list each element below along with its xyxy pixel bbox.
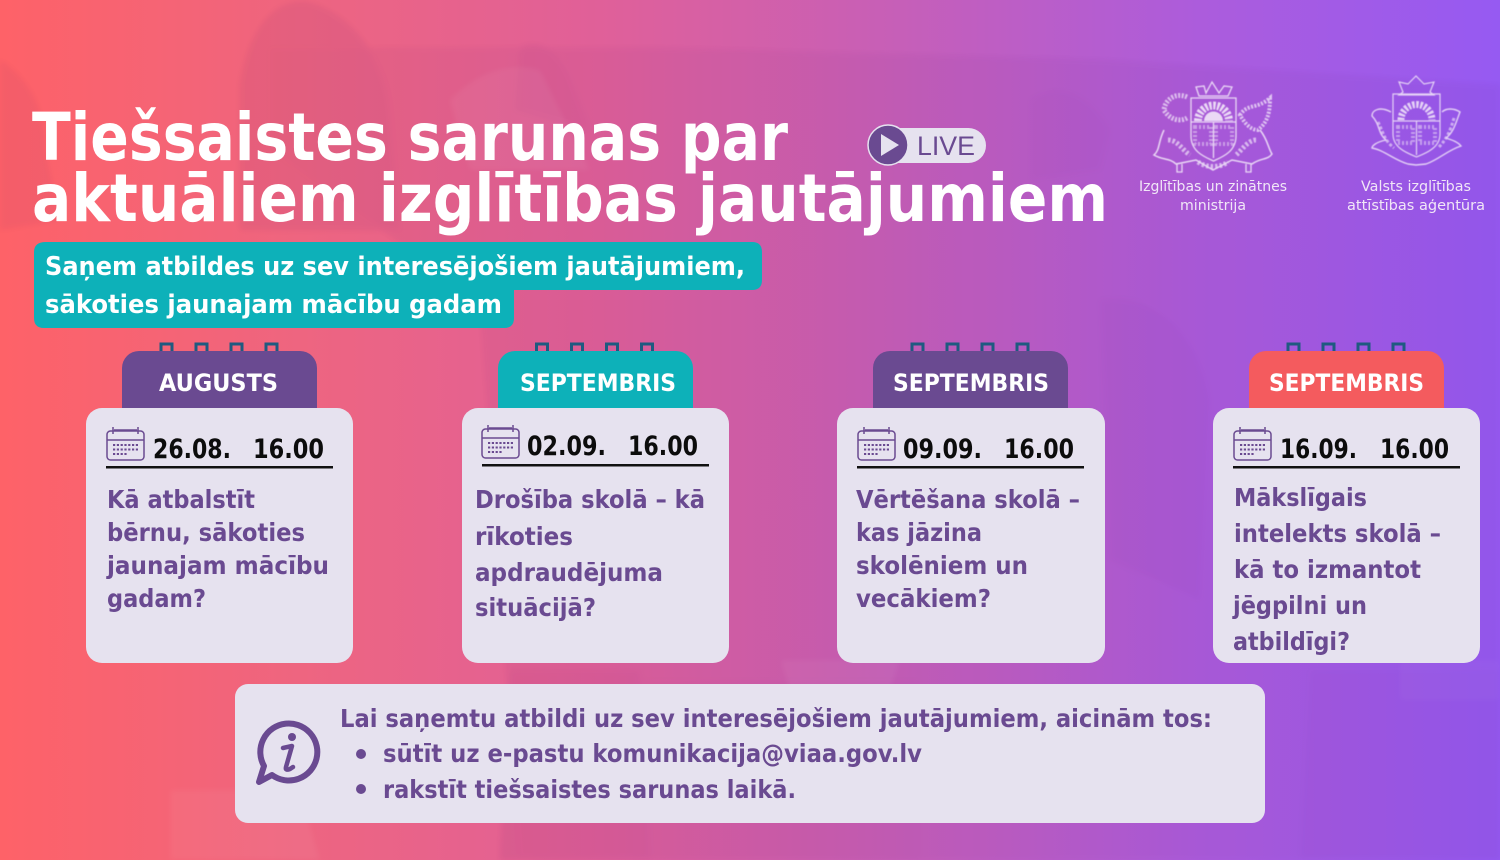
question text bbox=[856, 485, 1080, 613]
panel: event 2 September bbox=[462, 344, 729, 663]
date and time bbox=[857, 434, 1084, 468]
month tab: Septembris bbox=[1249, 351, 1444, 426]
title: aktuāliem izglītības jautājumiem bbox=[32, 160, 1108, 237]
question text: kas jāzina bbox=[856, 518, 982, 547]
question text: atbildīgi? bbox=[1233, 627, 1350, 656]
agency name bbox=[1347, 179, 1485, 214]
date and time: 16.00 bbox=[628, 431, 698, 462]
icon: live badge: LIVE bbox=[917, 131, 975, 161]
date and time: 16.00 bbox=[1380, 434, 1449, 465]
text: instructions: sūtīt uz e-pastu komunikacija@viaa.gov.lv bbox=[383, 739, 922, 768]
month tab: Septembris bbox=[873, 351, 1068, 426]
date and time: 09.09. bbox=[903, 434, 982, 465]
question text: rīkoties bbox=[475, 522, 573, 551]
date and time bbox=[1233, 434, 1460, 468]
month tab: Septembris bbox=[498, 351, 693, 426]
panel: event 9 September bbox=[837, 344, 1105, 663]
icon: live badge bbox=[868, 125, 986, 165]
question text bbox=[475, 485, 705, 622]
question text: intelekts skolā – bbox=[1234, 519, 1441, 548]
agency name: attīstības aģentūra bbox=[1347, 198, 1485, 214]
icon: calendar bbox=[107, 427, 144, 460]
question text: situācijā? bbox=[475, 593, 596, 622]
month tab: Augusts bbox=[122, 351, 317, 426]
title bbox=[32, 99, 1108, 237]
icon: calendar bbox=[482, 425, 519, 458]
subtitle highlight: sākoties jaunajam mācību gadam bbox=[45, 290, 502, 320]
logo: ministry coat of arms bbox=[1139, 82, 1287, 214]
question text: Vērtēšana skolā – bbox=[856, 485, 1080, 514]
month tab: Septembris: SEPTEMBRIS bbox=[520, 369, 676, 397]
date and time bbox=[482, 431, 709, 466]
question text: bērnu, sākoties bbox=[107, 518, 305, 547]
question text bbox=[106, 485, 329, 613]
question text: kā to izmantot bbox=[1234, 555, 1421, 584]
text: instructions: rakstīt tiešsaistes sarunas laikā. bbox=[383, 775, 796, 804]
month tab: Septembris: SEPTEMBRIS bbox=[893, 369, 1049, 397]
panel: event 16 September bbox=[1213, 344, 1480, 663]
subtitle highlight bbox=[34, 242, 762, 328]
ministry name: ministrija bbox=[1180, 198, 1246, 214]
question text: Kā atbalstīt bbox=[107, 485, 255, 514]
month tab: Septembris: SEPTEMBRIS bbox=[1269, 369, 1424, 397]
question text bbox=[1232, 483, 1441, 656]
date and time: 02.09. bbox=[527, 431, 606, 462]
question text: vecākiem? bbox=[856, 584, 991, 613]
icon: calendar bbox=[1234, 427, 1271, 460]
date and time: 16.00 bbox=[253, 434, 324, 465]
text: instructions: Lai saņemtu atbildi uz sev interesējošiem jautājumiem, aicinām tos: bbox=[340, 704, 1212, 733]
date and time: 16.09. bbox=[1280, 434, 1357, 465]
logo: agency coat of arms bbox=[1347, 76, 1485, 214]
date and time: 16.00 bbox=[1004, 434, 1074, 465]
ministry name bbox=[1139, 179, 1287, 214]
text: instructions bbox=[340, 704, 1212, 804]
date and time bbox=[106, 434, 333, 468]
date and time: 26.08. bbox=[153, 434, 231, 465]
question text: Mākslīgais bbox=[1234, 483, 1367, 512]
title: Tiešsaistes sarunas par bbox=[32, 99, 788, 176]
icon: calendar bbox=[858, 427, 895, 460]
icon: info speech bubble bbox=[259, 723, 317, 782]
panel: how to submit questions bbox=[235, 684, 1265, 823]
month tab: Augusts: AUGUSTS bbox=[159, 369, 278, 397]
panel: event 26 August bbox=[86, 344, 353, 663]
subtitle highlight: Saņem atbildes uz sev interesējošiem jautājumiem, bbox=[45, 252, 745, 282]
question text: jēgpilni un bbox=[1232, 591, 1367, 620]
agency name: Valsts izglītības bbox=[1361, 179, 1471, 195]
question text: gadam? bbox=[107, 584, 206, 613]
question text: skolēniem un bbox=[856, 551, 1028, 580]
question text: jaunajam mācību bbox=[106, 551, 329, 580]
question text: Drošība skolā – kā bbox=[475, 485, 705, 514]
ministry name: Izglītības un zinātnes bbox=[1139, 179, 1287, 195]
question text: apdraudējuma bbox=[475, 558, 663, 587]
